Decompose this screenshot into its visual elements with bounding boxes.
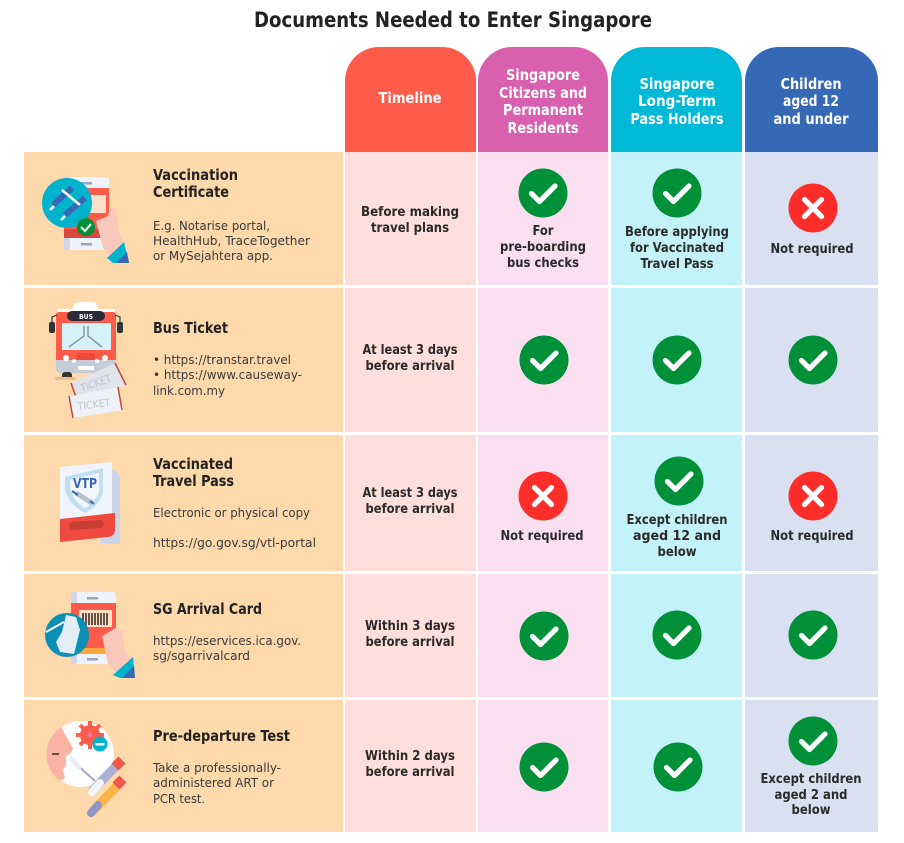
timeline: at least 3 days: At least 3 days [362,486,458,501]
text: Pre-departure Test [152,728,291,806]
text: Vaccination Certificate: Vaccination [153,167,238,184]
status: children required with exception: below [792,803,831,818]
status: citizens required [520,336,568,384]
text: Bus Ticket: Bus Ticket [153,320,229,337]
row 1: Vaccination Certificate [24,152,878,285]
column header: Singapore Long-Term Pass Holders: Singapore [640,75,714,93]
text: SG Arrival Card [153,601,301,663]
status: children required with exception: aged 2 and [774,788,848,803]
timeline: within 2 days: Within 2 days [365,749,455,764]
timeline: within 2 days: before arrival [366,765,454,780]
text: Vaccination Certificate: or MySejahtera app. [153,248,273,263]
column header: Singapore Citizens and Permanent Residents: Citizens and [499,84,587,102]
status: citizens required [520,612,568,660]
icon: phone with vaccine badge [42,177,129,263]
timeline: at least 3 days: At least 3 days [362,343,458,358]
timeline: at least 3 days: before arrival [366,359,454,374]
text: Pre-departure Test: PCR test. [153,791,205,806]
timeline: at least 3 days: before arrival [366,502,454,517]
text: SG Arrival Card: SG Arrival Card [153,601,262,618]
column header: Singapore Long-Term Pass Holders: Long-Term [638,92,716,110]
text: Bus Ticket: • https://transtar.travel [153,352,291,367]
status: long-term pass holders required [625,168,729,272]
text: Bus Ticket: • https://www.causeway- [153,367,302,382]
status: children not required [770,472,854,544]
text: Vaccination Certificate: Certificate [153,184,229,201]
status: children required with exception [760,716,862,818]
status: long-term pass holders required: aged 12 and [633,529,721,544]
column header: Children aged 12 and under: aged 12 [783,92,839,110]
status: citizens required [500,168,586,271]
icon: bus and tickets: BUS [79,313,93,321]
status: children not required [770,184,854,257]
column header: Children aged 12 and under: Children [780,75,842,93]
column header: Timeline: Timeline [378,89,442,107]
text: Vaccination Certificate [153,167,310,263]
status: children required [788,610,838,660]
timeline: within 3 days [365,619,455,650]
status: citizens not required: Not required [500,529,584,544]
text: Vaccination Certificate: HealthHub, TraceTogether [153,233,310,248]
status: citizens required: For [532,224,554,239]
status: long-term pass holders required [626,456,728,560]
status: long-term pass holders required: Travel Pass [640,257,714,272]
text: SG Arrival Card: https://eservices.ica.gov. [153,633,301,648]
status: long-term pass holders required: for Vaccinated [630,241,724,256]
row 2: Bus Ticket [24,288,878,432]
row 3: Vaccinated Travel Pass [24,435,878,571]
column header: Singapore Citizens and Permanent Residents [478,47,608,152]
status: long-term pass holders required: below [658,545,697,560]
text: Vaccinated Travel Pass: Travel Pass [153,473,234,490]
icon: nose swab and test tubes [46,721,123,813]
status: children not required: Not required [770,529,854,544]
row 5: Pre-departure Test [24,700,878,832]
column header: Timeline [345,47,476,152]
status: long-term pass holders required [652,336,702,384]
status: citizens required [520,742,568,792]
text: SG Arrival Card: sg/sgarrivalcard [153,648,250,663]
icon: bus and tickets: TICKET [78,373,113,395]
text: Vaccination Certificate: E.g. Notarise portal, [153,218,270,233]
text: Vaccinated Travel Pass [153,456,316,550]
text: Bus Ticket [153,320,302,398]
text: Vaccinated Travel Pass: https://go.gov.sg/vtl-portal [153,535,316,550]
status: citizens not required [500,472,584,544]
status: long-term pass holders required [654,742,702,792]
icon: bus and tickets [49,302,127,418]
column header: Children aged 12 and under [745,47,878,152]
status: long-term pass holders required: Before applying [625,225,729,240]
text: Pre-departure Test: Take a professionally- [152,760,281,775]
title: Documents Needed to Enter Singapore [254,8,652,32]
icon: bus and tickets: TICKET [76,397,111,413]
column header: Children aged 12 and under: and under [774,110,849,128]
icon: phone with barcode and globe [45,592,135,678]
text: Vaccinated Travel Pass: Electronic or physical copy [153,505,310,520]
status: children not required: Not required [770,242,854,257]
column header: Singapore Citizens and Permanent Residents: Permanent [503,101,584,119]
timeline: before making travel plans: Before making [361,205,459,220]
icon: VTP passport: VTP [73,477,97,492]
status: citizens required: bus checks [507,256,579,271]
timeline: within 3 days: before arrival [366,635,454,650]
status: long-term pass holders required [652,610,702,660]
status: children required [788,336,838,384]
column header: Singapore Long-Term Pass Holders [611,47,742,152]
status: citizens required: pre-boarding [500,240,586,255]
icon: VTP passport [60,462,120,544]
timeline: before making travel plans: travel plans [371,221,449,236]
text: Vaccinated Travel Pass: Vaccinated [153,456,233,473]
timeline: at least 3 days [362,343,458,374]
timeline: before making travel plans [361,205,459,236]
text: Pre-departure Test: Pre-departure Test [153,728,291,745]
row 4: SG Arrival Card [24,574,878,697]
column header: Singapore Citizens and Permanent Residents: Residents [508,119,578,137]
text: Pre-departure Test: administered ART or [153,775,274,790]
column header: Singapore Citizens and Permanent Residents: Singapore [506,66,580,84]
status: children required with exception: Except children [760,772,862,787]
text: Bus Ticket: link.com.my [153,383,225,398]
timeline: within 2 days [365,749,455,780]
status: long-term pass holders required: Except children [626,513,728,528]
timeline: within 3 days: Within 3 days [365,619,455,634]
column header: Singapore Long-Term Pass Holders: Pass Holders [630,110,724,128]
timeline: at least 3 days [362,486,458,517]
